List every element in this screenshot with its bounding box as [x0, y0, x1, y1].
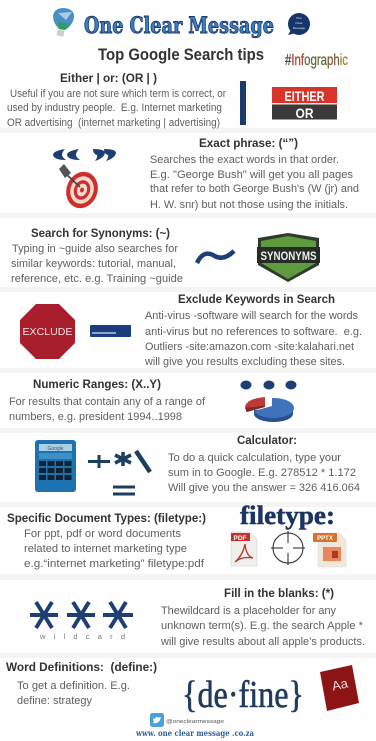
heading: Either | or: (OR | ) [60, 71, 157, 85]
icon: three asterisks [30, 602, 133, 628]
icon: dart target [59, 164, 103, 213]
logo title: One Clear Message [84, 13, 274, 39]
text block: For results that contain any of a range of [9, 396, 206, 408]
text block [24, 528, 205, 570]
text block: Useful if you are not sure which term is correct, or [10, 88, 226, 100]
text block: Searches the exact words in that order. [150, 154, 339, 166]
text block [160, 605, 365, 648]
icon: pptx file [313, 533, 346, 567]
hashtag: #Infographic [285, 52, 348, 69]
text block [11, 243, 183, 285]
icon: dictionary book: Aa [331, 675, 350, 694]
footer [135, 713, 254, 738]
text block: H. W. snr) but not those using the initials. [150, 199, 348, 211]
icon: math operators [88, 451, 150, 494]
icon: either or sign [272, 87, 337, 121]
text block [17, 680, 130, 707]
icon: either or sign: EITHER [284, 88, 324, 104]
text block [168, 452, 360, 494]
heading: Word Definitions: (define:) [6, 660, 157, 674]
icon: vertical pipe [240, 81, 246, 125]
text block [150, 154, 359, 211]
text block: E.g. "George Bush" will get you all pages [150, 169, 354, 181]
icon: exclude stop sign [20, 304, 75, 359]
filetype word: filetype: [240, 501, 335, 530]
panel: document types [7, 501, 346, 570]
icon: pdf file: PDF [234, 535, 247, 542]
icon: tilde [197, 251, 234, 263]
text block: To do a quick calculation, type your [168, 452, 341, 464]
panel: synonyms [11, 226, 320, 285]
text block: that refer to both George Bush's (W (jr) and [150, 183, 359, 195]
text block: define: strategy [17, 695, 92, 707]
heading: Calculator: [237, 433, 297, 447]
icon: calculator [35, 440, 76, 492]
icon: speech bubble [288, 13, 310, 35]
text block: similar keywords: tutorial, manual, [11, 258, 176, 270]
text block: numbers, e.g. president 1994..1998 [9, 411, 182, 423]
text block: Outliers -site:amazon.com -site:kalahari.net [145, 341, 354, 353]
icon: minus bar [90, 325, 131, 337]
text block [7, 88, 226, 129]
text block: e.g.“internet marketing” filetype:pdf [24, 558, 205, 570]
icon: quotation marks [53, 149, 116, 161]
header [53, 8, 348, 69]
text block: related to internet marketing type [24, 543, 187, 555]
text block: For ppt, pdf or word documents [24, 528, 182, 540]
panel: word definitions [6, 660, 359, 716]
icon: pptx file: PPTX [317, 536, 333, 542]
text block: anti-virus but no references to software. e.g. [145, 326, 362, 338]
twitter handle: @oneclearmessage [166, 719, 224, 725]
panel: exact phrase [53, 136, 359, 213]
heading: Search for Synonyms: (~) [31, 226, 170, 240]
icon: light bulb logo [53, 8, 74, 37]
icon: pdf file [231, 532, 257, 566]
heading: Fill in the blanks: (*) [224, 586, 334, 600]
text block: Typing in ~guide also searches for [12, 243, 178, 255]
panel: fill in the blanks [30, 586, 365, 648]
text block: Anti-virus -software will search for the words [145, 310, 358, 322]
text block [144, 310, 362, 368]
icon: three dots [240, 380, 296, 390]
wildcard label: w i l d c a r d [39, 632, 125, 641]
define word: {de·fine} [182, 674, 304, 716]
icon: either or sign: OR [296, 105, 314, 121]
icon: calculator: Google [47, 446, 64, 452]
text block: will give you results excluding these sites. [144, 356, 345, 368]
icon: exclude stop sign: EXCLUDE [22, 326, 72, 338]
heading: Numeric Ranges: (X..Y) [33, 377, 161, 391]
text block: unknown term(s). E.g. the search Apple * [161, 620, 364, 632]
text block: OR advertising (internet marketing | advertising) [7, 117, 220, 129]
icon: synonyms badge [257, 233, 320, 282]
panel: numeric ranges [9, 377, 296, 423]
text block [9, 396, 206, 423]
text block: To get a definition. E.g. [17, 680, 130, 692]
panel: calculator [35, 433, 360, 494]
text block: will give results about all apple’s products. [160, 636, 365, 648]
icon: crosshair [271, 531, 305, 565]
panel: either or [7, 71, 337, 129]
text block: used by industry people. E.g. Internet marketing [7, 102, 222, 114]
icon: speech bubble: Clear [295, 21, 303, 25]
text block: Will give you the answer = 326 416.064 [168, 482, 360, 494]
icon: pie chart [245, 397, 294, 422]
text block: Thewildcard is a placeholder for any [161, 605, 336, 617]
heading: Exclude Keywords in Search [178, 292, 335, 306]
icon: speech bubble: Message [293, 26, 305, 30]
text block: sum in to Google. E.g. 278512 * 1.172 [168, 467, 356, 479]
heading: Exact phrase: (“”) [199, 136, 298, 150]
panel: exclude keywords [20, 292, 362, 368]
main heading: Top Google Search tips [98, 46, 264, 64]
icon: twitter [150, 713, 164, 727]
icon: dictionary book [320, 665, 359, 711]
website url: www. one clear message .co.za [135, 728, 254, 738]
text block: reference, etc. e.g. Training ~guide [11, 273, 183, 285]
icon: synonyms badge: SYNONYMS [260, 249, 316, 263]
heading: Specific Document Types: (filetype:) [7, 511, 206, 525]
icon: speech bubble: One [296, 16, 302, 20]
